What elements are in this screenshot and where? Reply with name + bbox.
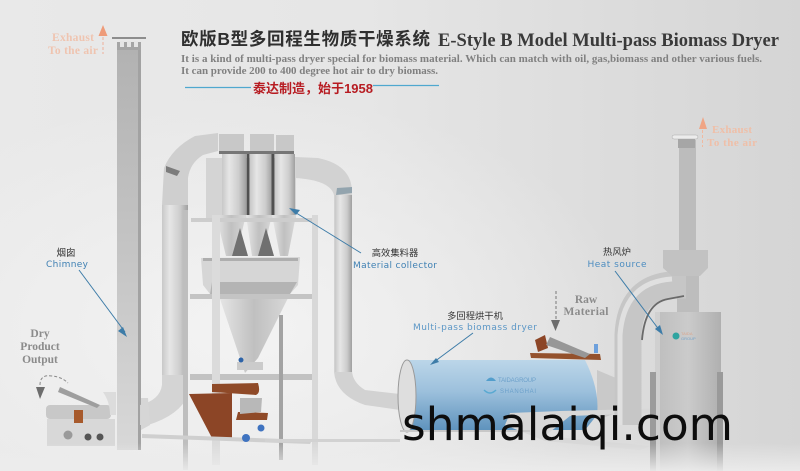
description: It is a kind of multi-pass dryer special for biomass material. Which can match with oil, gas,biomass and other various fuels. (181, 53, 762, 65)
dryer callout: Multi-pass biomass dryer (413, 323, 537, 333)
title: E-Style B Model Multi-pass Biomass Dryer (438, 31, 779, 51)
hopper (201, 257, 300, 294)
material collector structure (140, 133, 400, 470)
dryer logo: TAIDAGROUP (498, 378, 536, 384)
description: It can provide 200 to 400 degree hot air to dry biomass. (181, 65, 438, 77)
heat source (620, 140, 723, 471)
heat source: GROUP (681, 336, 696, 341)
chimney callout: 烟囱 (56, 247, 76, 259)
dry product output machine (46, 387, 150, 446)
dry product output label: Product (20, 341, 60, 353)
dryer callout (413, 310, 537, 365)
left duct (162, 133, 218, 375)
exhaust label left: To the air (48, 45, 98, 57)
heat source callout: 热风炉 (603, 246, 631, 257)
multi-pass dryer (398, 360, 680, 450)
raw material feeder (530, 335, 601, 360)
raw material label (551, 291, 608, 331)
exhaust label right: To the air (707, 137, 757, 149)
chimney (112, 37, 146, 450)
exhaust label right (699, 117, 757, 149)
dry product output label (20, 328, 68, 399)
rust equipment (189, 393, 232, 438)
right duct (295, 157, 400, 410)
dryer callout: 多回程烘干机 (447, 310, 504, 321)
exhaust label left (48, 25, 108, 57)
slogan: 泰达制造，始于1958 (253, 81, 373, 96)
exhaust label right: Exhaust (712, 124, 752, 136)
raw material label: Raw (575, 294, 598, 306)
title (181, 29, 779, 51)
cyclones (206, 158, 296, 218)
platforms and legs (190, 294, 313, 299)
watermark: shmalaiqi.com (402, 398, 733, 451)
description (181, 53, 762, 77)
raw material label: Material (564, 306, 608, 318)
heat source callout (588, 246, 663, 335)
material collector callout: 高效集料器 (372, 247, 419, 258)
dryer logo (484, 378, 536, 395)
material collector callout (289, 208, 437, 271)
floor reflection (0, 443, 800, 471)
dry product output label: Output (22, 354, 58, 366)
exhaust label left: Exhaust (52, 32, 94, 44)
material collector callout: Material collector (353, 261, 437, 271)
heat source callout: Heat source (588, 260, 647, 270)
heat source: TAIDA (681, 331, 693, 336)
chimney callout: Chimney (46, 260, 89, 270)
dry product output label: Dry (30, 328, 50, 340)
heat source stack cap (672, 135, 698, 148)
title: 欧版B型多回程生物质干燥系统 (181, 29, 430, 49)
dryer logo: SHANGHAI (500, 389, 536, 395)
chimney callout (46, 247, 127, 337)
